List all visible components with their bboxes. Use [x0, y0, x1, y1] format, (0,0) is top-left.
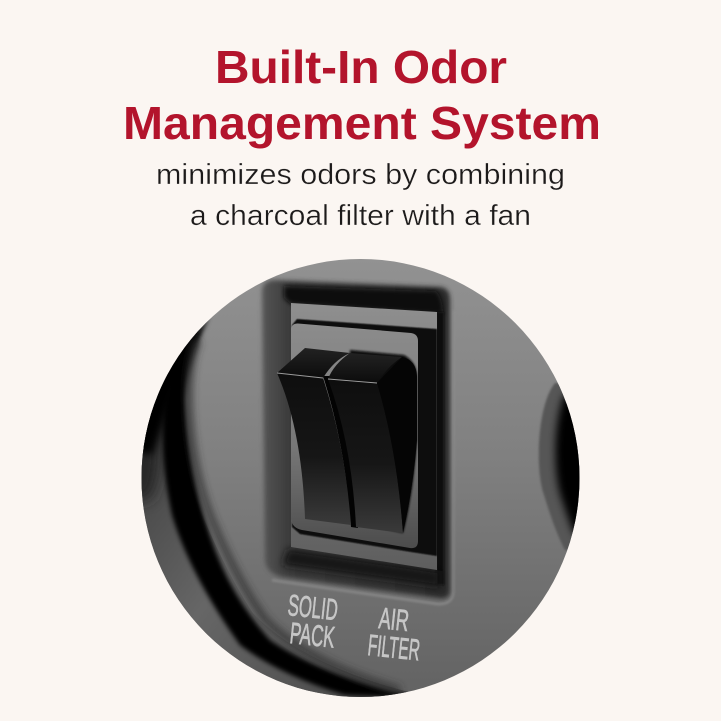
housing surface: [140, 256, 582, 700]
recess right shadow: [436, 312, 444, 585]
title: Management System: [123, 97, 601, 149]
left curved groove: [142, 318, 408, 697]
subtitle: minimizes odors by combining: [156, 159, 565, 191]
rocker switch: air filter: [328, 353, 417, 533]
rocker switch: solid pack: [277, 348, 351, 525]
gap between rockers: [323, 376, 358, 528]
recess walls: [262, 280, 450, 598]
rocker cap left: [277, 348, 350, 378]
dark shadow around plate: [292, 319, 437, 556]
rocker face right: [328, 379, 403, 533]
recess bottom shadow: [282, 549, 440, 587]
switch bezel plate: [291, 303, 437, 570]
label: air filter: [368, 608, 420, 661]
label: air filter: AIR: [377, 603, 410, 638]
label: solid pack: [288, 594, 338, 648]
switch recess: [262, 280, 453, 604]
rocker highlight left: [277, 373, 323, 378]
label: solid pack: SOLID: [286, 589, 339, 628]
rocker face left: [277, 373, 351, 525]
title: [123, 41, 601, 149]
inner light plate: [291, 323, 418, 548]
product close-up circle: [130, 256, 600, 705]
rocker cap right: [328, 353, 402, 383]
label: air filter: FILTER: [366, 629, 422, 668]
right dark cut-out: [538, 382, 580, 550]
title: Built-In Odor: [215, 41, 507, 93]
rocker highlight right: [328, 379, 377, 383]
shadow cast by rockers: [345, 350, 417, 533]
recess top shadow: [284, 286, 443, 314]
label: solid pack: PACK: [288, 617, 336, 655]
rocker side right: [377, 357, 417, 533]
subtitle: [156, 159, 565, 232]
recess highlight: [272, 358, 455, 606]
subtitle: a charcoal filter with a fan: [190, 200, 531, 232]
